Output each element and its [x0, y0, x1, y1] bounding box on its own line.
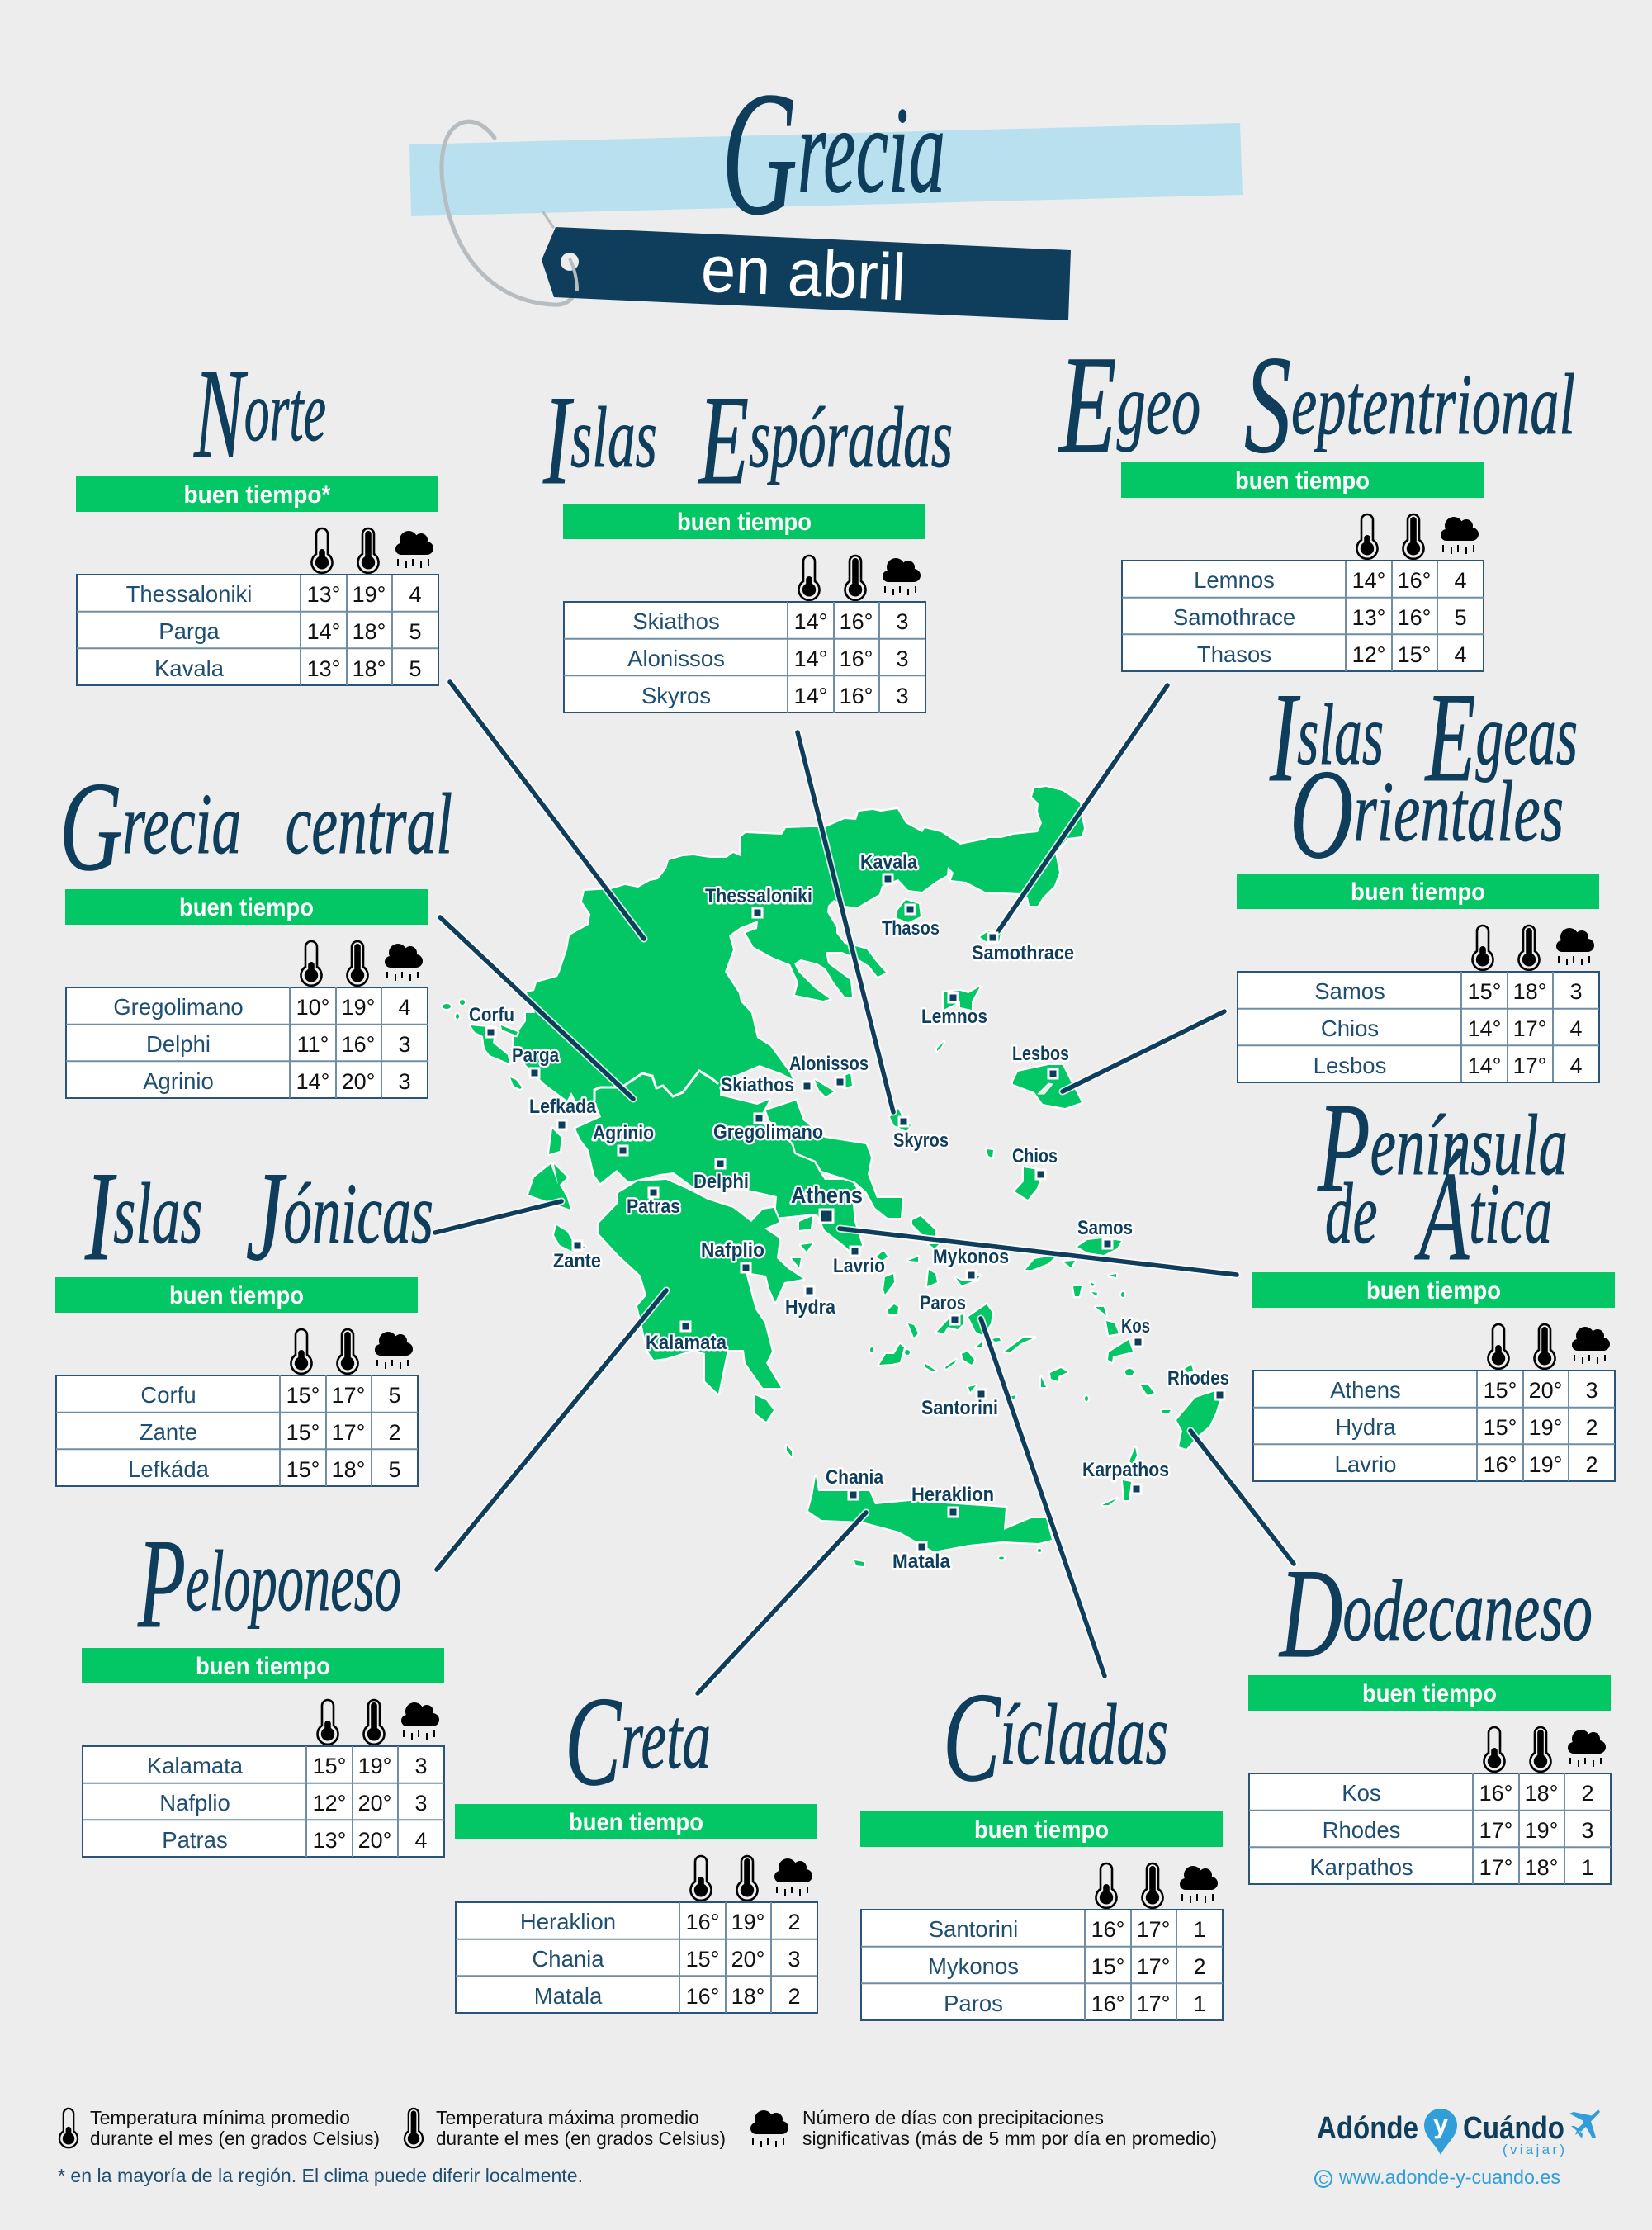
table block: Creta: 16° — [686, 1984, 719, 2009]
panel: Dodecaneso — [1248, 1542, 1611, 1884]
heading: Islas Jónicas: J — [246, 1145, 286, 1287]
heading: Egeo Septentrional: E — [1058, 327, 1117, 482]
city labels: Heraklion — [911, 1484, 994, 1506]
table block: Egeo Septentrional: 12° — [1352, 642, 1385, 667]
title block — [409, 54, 1243, 320]
panel: Islas Jónicas — [55, 1145, 433, 1486]
table block: Cícladas: buen tiempo — [974, 1816, 1109, 1844]
panel: Islas Egeas Orientales — [1237, 666, 1599, 1082]
city labels: Skyros — [893, 1129, 949, 1152]
panel: Egeo Septentrional — [1058, 327, 1575, 671]
table block: Islas Jónicas: 15° — [286, 1420, 320, 1445]
city labels: Athens — [791, 1182, 863, 1208]
city labels: Hydra — [785, 1296, 836, 1319]
legend: minimum temperature: Temperatura mínima promedio — [90, 2107, 350, 2128]
heading: Norte: orte — [244, 362, 326, 459]
Euboea — [766, 1101, 902, 1218]
table block: Islas Jónicas: 5 — [388, 1457, 401, 1482]
table block: Península de Ática: Hydra — [1335, 1414, 1396, 1440]
table block: Islas Egeas Orientales: 17° — [1513, 1053, 1546, 1078]
table block: Península de Ática: 15° — [1484, 1415, 1517, 1440]
city labels: Nafplio — [701, 1239, 764, 1262]
city labels: Mykonos — [933, 1246, 1009, 1268]
tag string — [442, 121, 577, 305]
table block: Norte: 19° — [353, 582, 386, 607]
table block: Norte: 13° — [307, 582, 340, 607]
table block: Creta: Matala — [534, 1983, 603, 2009]
table block: Dodecaneso: Kos — [1342, 1780, 1381, 1806]
city labels: Patras — [627, 1195, 680, 1218]
heading: Islas Egeas Orientales: slas — [1297, 686, 1426, 783]
tag hole — [561, 253, 579, 271]
table block: Cícladas: 2 — [1193, 1954, 1206, 1979]
main title: G — [722, 54, 798, 252]
table block: Egeo Septentrional: 4 — [1454, 568, 1467, 593]
table block: Creta: 16° — [686, 1910, 719, 1934]
table block: Islas Egeas Orientales: 4 — [1569, 1053, 1583, 1078]
city markers — [486, 874, 1224, 1551]
heading: Islas Egeas Orientales: rientales — [1354, 763, 1564, 859]
table block: Cícladas: 1 — [1193, 1991, 1206, 2016]
city labels: Samothrace — [972, 942, 1074, 964]
table block: Norte — [76, 476, 438, 685]
table block: Dodecaneso: 1 — [1581, 1855, 1594, 1880]
heading: Islas Egeas Orientales: geas — [1475, 686, 1578, 783]
panel: Creta — [455, 1670, 817, 2013]
table block: Grecia central: 3 — [398, 1032, 411, 1057]
legend: minimum temperature: durante el mes (en grados Celsius) — [90, 2128, 380, 2149]
table block: Dodecaneso: 18° — [1525, 1855, 1558, 1880]
table block: Península de Ática: Athens — [1330, 1377, 1401, 1403]
city labels: Samos — [1077, 1217, 1133, 1239]
table block: Islas Jónicas — [55, 1277, 418, 1486]
city labels — [469, 851, 1229, 1573]
table block: Dodecaneso: 19° — [1525, 1818, 1558, 1843]
table block: Cícladas: Paros — [944, 1991, 1003, 2016]
city labels: Lemnos — [921, 1006, 987, 1028]
city labels: Zante — [553, 1250, 601, 1272]
table block: Islas Egeas Orientales: 14° — [1468, 1053, 1501, 1078]
table block: Creta: 15° — [686, 1947, 719, 1972]
panel: Cícladas — [860, 1666, 1223, 2020]
heading: Islas Egeas Orientales: O — [1290, 743, 1354, 885]
Lesbos gulf — [1038, 1083, 1053, 1094]
table block: Islas Espóradas: Skyros — [641, 683, 711, 708]
table block: Islas Jónicas: 18° — [332, 1457, 365, 1482]
table block: Peloponeso: 20° — [358, 1791, 391, 1816]
table block: Egeo Septentrional: Thasos — [1197, 642, 1271, 667]
copyright icon: C — [1318, 2173, 1328, 2187]
heading: Islas Espóradas: slas — [570, 389, 698, 485]
table block: Dodecaneso: 16° — [1479, 1781, 1512, 1806]
city labels: Skiathos — [721, 1074, 794, 1096]
table block: Islas Espóradas: buen tiempo — [677, 509, 812, 536]
table block: Península de Ática: 20° — [1529, 1378, 1562, 1403]
heading: Islas Jónicas: I — [84, 1145, 116, 1287]
table block: Dodecaneso: Rhodes — [1323, 1817, 1400, 1843]
table block: Grecia central: 11° — [297, 1032, 329, 1057]
city labels: Kos — [1121, 1315, 1150, 1338]
table block: Islas Egeas Orientales: 4 — [1569, 1016, 1583, 1041]
city labels: Karpathos — [1082, 1459, 1169, 1481]
heading: Grecia central: recia central — [122, 775, 452, 872]
table block: Islas Espóradas: 14° — [794, 646, 827, 671]
copyright icon — [1315, 2171, 1332, 2187]
table block: Islas Jónicas: buen tiempo — [169, 1282, 304, 1309]
panel: Peloponeso — [82, 1513, 444, 1857]
city labels: Lavrio — [833, 1255, 885, 1277]
table block: Cícladas: 15° — [1091, 1954, 1124, 1979]
logo — [1315, 2109, 1600, 2189]
regional border — [594, 1071, 718, 1101]
table block: Norte: 18° — [353, 619, 386, 644]
heading: Egeo Septentrional: geo — [1117, 356, 1244, 452]
city labels: Chios — [1012, 1145, 1058, 1167]
title banner — [409, 123, 1243, 216]
heading: Islas Egeas Orientales: I — [1269, 666, 1300, 808]
heading: Península de Ática: de — [1325, 1165, 1407, 1262]
table block: Grecia central: 10° — [296, 995, 329, 1020]
table block: Peloponeso: 3 — [414, 1791, 428, 1816]
table block: Islas Jónicas: 17° — [332, 1383, 365, 1408]
heading: Península de Ática: tica — [1469, 1165, 1552, 1262]
table block: Peloponeso: 19° — [358, 1754, 391, 1778]
table block: Peloponeso: buen tiempo — [196, 1653, 330, 1680]
table block: Dodecaneso — [1248, 1675, 1611, 1884]
heading: Cícladas: C — [943, 1666, 1001, 1808]
table block: Dodecaneso: 3 — [1581, 1818, 1594, 1843]
logo plane — [1569, 2109, 1600, 2138]
table block: Egeo Septentrional — [1121, 462, 1484, 671]
heading: Islas Espóradas: I — [542, 369, 574, 511]
table block: Cícladas: 17° — [1137, 1954, 1170, 1979]
map of Greece — [443, 787, 1220, 1566]
tag ring end — [570, 258, 577, 291]
logo pin — [1424, 2109, 1457, 2155]
table block: Grecia central — [65, 889, 428, 1098]
table block: Norte: Thessaloniki — [126, 581, 252, 607]
city labels: Corfu — [469, 1004, 514, 1026]
table block: Islas Espóradas: 14° — [794, 609, 827, 634]
table block: Norte: 4 — [409, 582, 422, 607]
table block: Peloponeso: 4 — [414, 1828, 428, 1853]
heading: Islas Jónicas: slas — [113, 1165, 246, 1262]
table block: Península de Ática — [1252, 1272, 1615, 1481]
city labels: Santorini — [921, 1397, 998, 1419]
city labels: Paros — [920, 1292, 966, 1314]
islands — [443, 900, 1220, 1566]
table block: Islas Espóradas: 3 — [896, 684, 909, 708]
table block: Peloponeso: 20° — [358, 1828, 391, 1853]
table block: Islas Espóradas: 14° — [794, 684, 827, 708]
city labels: Lesbos — [1012, 1043, 1069, 1065]
table block: Islas Egeas Orientales: Chios — [1321, 1016, 1379, 1041]
city labels: Kavala — [860, 851, 918, 874]
table block: Grecia central: 20° — [342, 1069, 375, 1094]
legend: maximum temperature: Temperatura máxima promedio — [436, 2107, 699, 2128]
panel: Islas Espóradas — [542, 369, 953, 713]
table block: Egeo Septentrional: 14° — [1352, 568, 1385, 593]
table block: Creta: 2 — [788, 1984, 801, 2009]
table block: Norte: 13° — [307, 656, 340, 681]
city labels: Delphi — [693, 1171, 749, 1193]
legend: maximum temperature: durante el mes (en grados Celsius) — [436, 2128, 726, 2149]
city labels: Thessaloniki — [705, 885, 812, 907]
table block: Grecia central: 16° — [342, 1032, 375, 1057]
legend: precipitation — [750, 2107, 1217, 2149]
table block: Islas Egeas Orientales: Samos — [1314, 978, 1385, 1004]
table block: Cícladas: 16° — [1091, 1991, 1124, 2016]
mainland — [514, 787, 1084, 1255]
table block: Egeo Septentrional: 4 — [1454, 642, 1467, 667]
table block: Grecia central: buen tiempo — [179, 894, 314, 921]
table block: Península de Ática: 2 — [1585, 1452, 1598, 1477]
table block: Peloponeso: Kalamata — [147, 1753, 244, 1778]
table block: Islas Jónicas: 15° — [286, 1457, 320, 1482]
table block: Grecia central: Agrinio — [143, 1068, 214, 1094]
table block: Grecia central: Gregolimano — [113, 994, 244, 1020]
table block: Islas Jónicas: Zante — [140, 1419, 197, 1445]
city labels: Gregolimano — [713, 1121, 823, 1143]
table block: Cícladas: 1 — [1193, 1917, 1206, 1942]
table block: Islas Egeas Orientales: buen tiempo — [1351, 878, 1485, 906]
website: www.adonde-y-cuando.es — [1338, 2166, 1560, 2189]
table block: Grecia central: 4 — [398, 995, 411, 1020]
table block: Grecia central: Delphi — [146, 1031, 211, 1057]
table block: Creta: Chania — [532, 1946, 604, 1972]
heading: Islas Egeas Orientales: E — [1424, 666, 1475, 808]
table block: Egeo Septentrional: 13° — [1352, 605, 1385, 630]
heading: Península de Ática: P — [1317, 1077, 1370, 1219]
table block: Cícladas: Mykonos — [928, 1953, 1019, 1979]
table block: Península de Ática: buen tiempo — [1366, 1277, 1501, 1304]
table block: Dodecaneso: 18° — [1525, 1781, 1558, 1806]
price tag — [542, 227, 1071, 320]
city labels: Chania — [826, 1466, 884, 1489]
logo tagline: (viajar) — [1503, 2142, 1564, 2157]
table block: Península de Ática: 19° — [1529, 1452, 1562, 1477]
city labels: Agrinio — [593, 1122, 654, 1144]
legend: precipitation: Número de días con precipitaciones — [802, 2107, 1104, 2128]
legend: maximum temperature — [405, 2107, 726, 2149]
table block: Islas Egeas Orientales: 14° — [1468, 1016, 1501, 1041]
table block: Creta — [455, 1804, 817, 2013]
heading: Islas Espóradas: spóradas — [749, 389, 953, 485]
table block: Peloponeso: 3 — [414, 1754, 428, 1778]
city labels: Thasos — [882, 917, 940, 940]
heading: Creta: C — [565, 1670, 622, 1812]
city labels: Lefkada — [529, 1096, 597, 1118]
table block: Península de Ática: 19° — [1529, 1415, 1562, 1440]
table block: Islas Egeas Orientales: Lesbos — [1314, 1053, 1386, 1078]
heading: Islas Espóradas: E — [698, 369, 749, 511]
table block: Peloponeso: Nafplio — [159, 1790, 230, 1816]
table block: Peloponeso: 15° — [313, 1754, 346, 1778]
city labels: Kalamata — [646, 1332, 727, 1354]
table block: Islas Espóradas: 3 — [896, 609, 909, 634]
table block: Creta: 19° — [731, 1910, 764, 1934]
heading: Creta: reta — [621, 1690, 711, 1787]
table block: Norte: 14° — [307, 619, 340, 644]
table block: Cícladas: 17° — [1137, 1991, 1170, 2016]
table block: Peloponeso: 12° — [313, 1791, 346, 1816]
table block: Grecia central: 19° — [342, 995, 375, 1020]
city labels: Alonissos — [789, 1053, 869, 1075]
table block: Islas Espóradas: 16° — [840, 684, 873, 708]
table block: Islas Espóradas: 16° — [840, 646, 873, 671]
table block: Islas Egeas Orientales: 18° — [1513, 979, 1546, 1004]
table block: Creta: 20° — [731, 1947, 764, 1972]
table block: Islas Espóradas: Skiathos — [632, 608, 720, 634]
table block: Islas Jónicas: 17° — [332, 1420, 365, 1445]
table block: Islas Jónicas: Corfu — [140, 1382, 196, 1408]
table block: Islas Espóradas: 3 — [896, 646, 909, 671]
Peloponnese — [599, 1180, 803, 1394]
table block: Creta: 18° — [731, 1984, 764, 2009]
footnote: * en la mayoría de la región. El clima puede diferir localmente. — [58, 2165, 583, 2186]
table block: Grecia central: 14° — [296, 1069, 329, 1094]
table block: Islas Espóradas — [563, 504, 925, 713]
table block: Egeo Septentrional: 5 — [1454, 605, 1467, 630]
table block: Peloponeso: Patras — [162, 1827, 228, 1853]
table block: Islas Espóradas: 16° — [840, 609, 873, 634]
heading: Islas Egeas Orientales — [1269, 666, 1578, 885]
heading: Peloponeso: eloponeso — [186, 1532, 401, 1629]
heading: Norte: N — [193, 343, 248, 485]
table block: Islas Egeas Orientales: 15° — [1468, 979, 1501, 1004]
table block: Creta: buen tiempo — [569, 1809, 703, 1836]
heading: Peloponeso: P — [137, 1513, 186, 1655]
table block: Norte: 5 — [409, 619, 422, 644]
table block: Egeo Septentrional: 16° — [1398, 605, 1431, 630]
heading: Dodecaneso: D — [1279, 1542, 1342, 1684]
table block: Dodecaneso: 17° — [1479, 1855, 1512, 1880]
table block: Egeo Septentrional: buen tiempo — [1235, 467, 1370, 495]
table block: Islas Egeas Orientales: 3 — [1569, 979, 1583, 1004]
table block: Dodecaneso: Karpathos — [1309, 1854, 1413, 1880]
heading: Grecia central: G — [59, 755, 122, 897]
table block: Grecia central: 3 — [398, 1069, 411, 1094]
table block: Islas Jónicas: Lefkáda — [128, 1456, 210, 1482]
table block: Península de Ática: 3 — [1585, 1378, 1598, 1403]
table block: Dodecaneso: 2 — [1581, 1781, 1594, 1806]
table block: Península de Ática: 15° — [1484, 1378, 1517, 1403]
table block: Península de Ática: 2 — [1585, 1415, 1598, 1440]
heading: Cícladas: ícladas — [1000, 1686, 1168, 1783]
table block: Egeo Septentrional: Lemnos — [1194, 567, 1275, 593]
table block: Norte: Kavala — [154, 656, 225, 681]
table block: Islas Egeas Orientales: 17° — [1513, 1016, 1546, 1041]
table block: Islas Jónicas: 5 — [388, 1383, 401, 1408]
leader lines — [435, 682, 1294, 1693]
table block: Egeo Septentrional: Samothrace — [1173, 604, 1295, 630]
table block: Peloponeso — [82, 1648, 444, 1857]
logo wordmark right: Cuándo — [1463, 2111, 1564, 2146]
table block: Cícladas: 16° — [1091, 1917, 1124, 1942]
heading: Egeo Septentrional: S — [1244, 327, 1291, 482]
legend: minimum temperature — [59, 2107, 380, 2149]
table block: Islas Jónicas: 15° — [286, 1383, 320, 1408]
logo pin: y — [1433, 2109, 1448, 2139]
table block: Norte: 18° — [353, 656, 386, 681]
city labels: Parga — [512, 1044, 560, 1067]
table block: Egeo Septentrional: 16° — [1398, 568, 1431, 593]
heading: Islas Jónicas: ónicas — [283, 1165, 433, 1262]
table block: Creta: Heraklion — [520, 1909, 616, 1934]
table block: Norte: 5 — [409, 656, 422, 681]
table block: Islas Egeas Orientales — [1237, 874, 1599, 1082]
table block: Peloponeso: 13° — [313, 1828, 346, 1853]
city labels: Matala — [892, 1551, 951, 1573]
panel: Península de Ática — [1252, 1077, 1615, 1481]
table block: Cícladas — [860, 1811, 1223, 2020]
legend — [58, 2107, 1217, 2186]
panel: Norte — [76, 343, 438, 685]
table block: Península de Ática: Lavrio — [1335, 1451, 1396, 1477]
table block: Islas Espóradas: Alonissos — [627, 646, 725, 671]
table block: Creta: 2 — [788, 1910, 801, 1934]
table block: Cícladas: Santorini — [929, 1916, 1018, 1942]
table block: Dodecaneso: buen tiempo — [1362, 1680, 1497, 1707]
table block: Norte: Parga — [159, 618, 220, 644]
logo wordmark left: Adónde — [1317, 2111, 1418, 2146]
table block: Egeo Septentrional: 15° — [1398, 642, 1431, 667]
legend: precipitation: significativas (más de 5 mm por día en promedio) — [802, 2128, 1217, 2149]
city labels: Rhodes — [1167, 1367, 1229, 1390]
panel: Grecia central — [59, 755, 452, 1098]
heading: Península de Ática — [1317, 1077, 1568, 1287]
heading: Península de Ática: Á — [1414, 1145, 1470, 1287]
table block: Cícladas: 17° — [1137, 1917, 1170, 1942]
table block: Península de Ática: 16° — [1484, 1452, 1517, 1477]
table block: Islas Jónicas: 2 — [388, 1420, 401, 1445]
Crete — [808, 1476, 1052, 1551]
main title: recia — [798, 82, 945, 219]
subtitle: en abril — [699, 232, 907, 314]
table block: Dodecaneso: 17° — [1479, 1818, 1512, 1843]
table block: Norte: buen tiempo* — [183, 481, 331, 509]
table block: Creta: 3 — [788, 1947, 801, 1972]
